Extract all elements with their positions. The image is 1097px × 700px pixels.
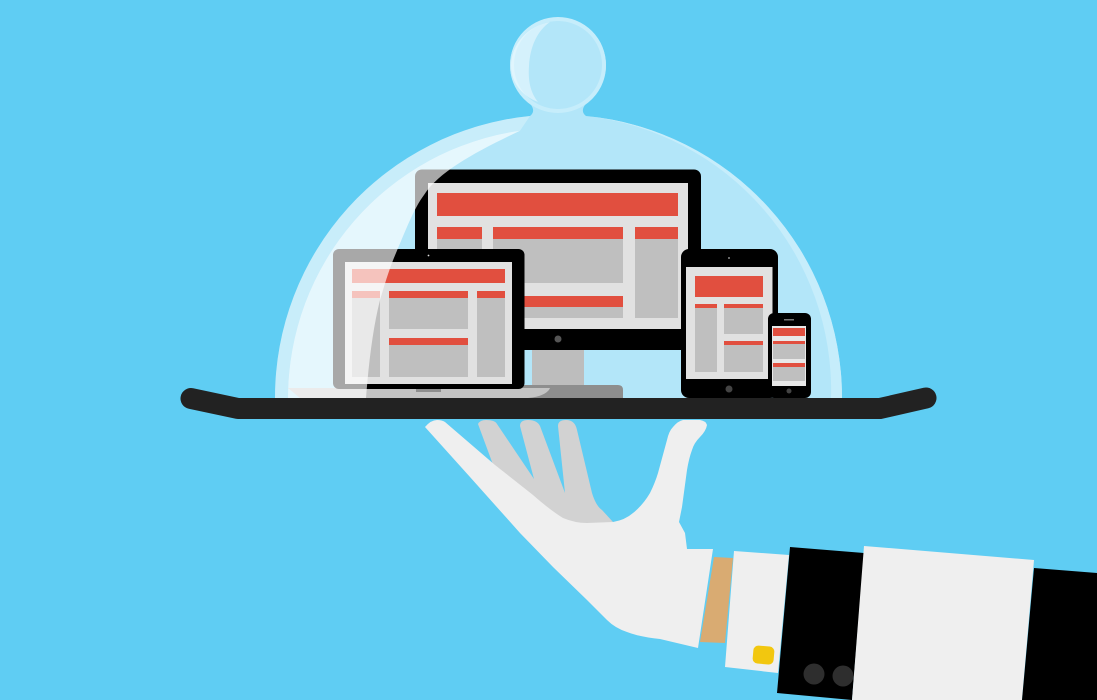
shirt cuff bbox=[725, 551, 789, 673]
phone screen bbox=[772, 326, 806, 386]
tablet body bbox=[681, 249, 778, 398]
monitor stand bbox=[532, 348, 584, 386]
black jacket sleeve bbox=[1022, 568, 1097, 700]
gloved hand bbox=[425, 420, 713, 648]
tablet bbox=[681, 249, 778, 398]
laptop screen bbox=[345, 262, 512, 384]
desktop monitor bbox=[415, 170, 701, 398]
white jacket sleeve bbox=[852, 546, 1034, 700]
smartphone bbox=[768, 313, 811, 398]
tablet home button bbox=[726, 386, 732, 392]
phone home button bbox=[786, 388, 792, 394]
black sleeve cuff bbox=[777, 547, 864, 700]
sleeve buttons bbox=[804, 664, 854, 686]
cufflink bbox=[752, 645, 775, 665]
phone layout blocks bbox=[773, 328, 805, 381]
tablet screen bbox=[686, 267, 772, 379]
laptop layout blocks bbox=[352, 269, 505, 377]
monitor screen bbox=[428, 183, 688, 329]
monitor frame bbox=[415, 170, 701, 350]
monitor base bbox=[500, 385, 623, 398]
tablet layout blocks bbox=[695, 276, 763, 372]
laptop lid bbox=[333, 249, 524, 389]
monitor button bbox=[554, 336, 562, 342]
phone body bbox=[768, 313, 811, 398]
monitor layout blocks bbox=[437, 193, 678, 318]
glass highlight on cloche bbox=[275, 22, 550, 398]
serving tray bbox=[191, 398, 926, 408]
gloved fingers in shadow bbox=[478, 420, 613, 530]
laptop camera bbox=[428, 255, 429, 256]
wrist bbox=[700, 557, 733, 643]
laptop bbox=[288, 249, 550, 398]
tablet camera bbox=[728, 257, 730, 259]
laptop notch bbox=[416, 389, 441, 392]
glove palm and thumb bbox=[425, 420, 713, 648]
phone speaker bbox=[784, 319, 794, 320]
glass cloche body and knob bbox=[275, 17, 842, 398]
laptop base bbox=[288, 388, 550, 398]
